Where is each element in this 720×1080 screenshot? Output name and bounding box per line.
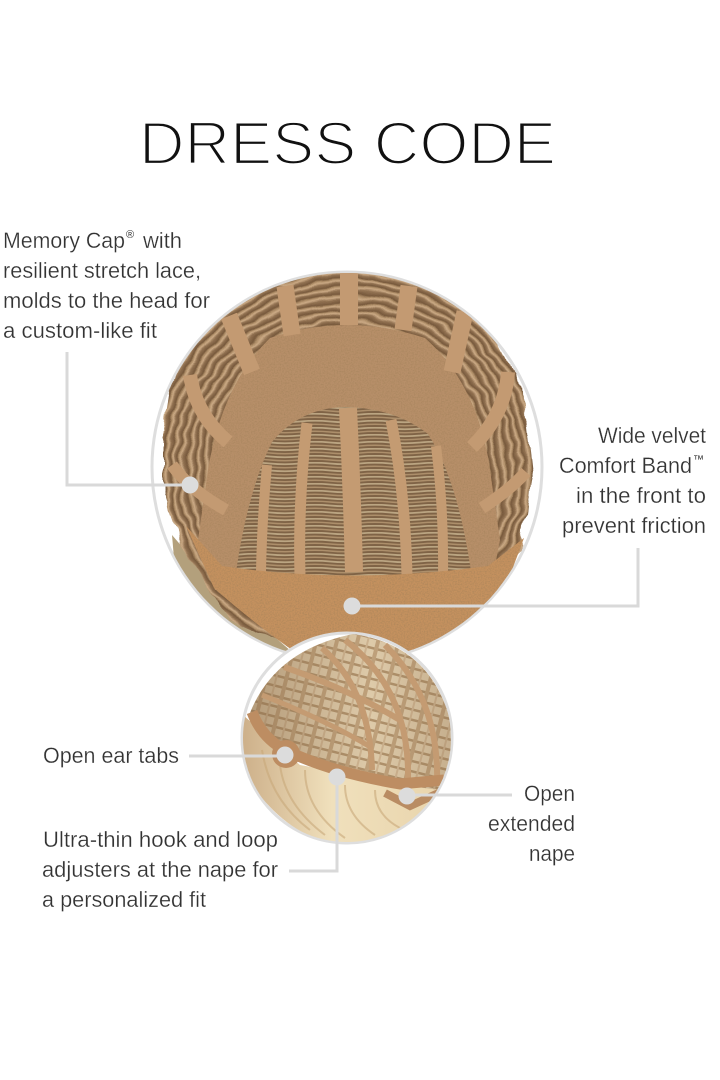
- callout: comfort band: [344, 423, 706, 614]
- dome shading: [250, 634, 452, 790]
- dome straps: [262, 640, 437, 785]
- inner wefts opening: [236, 407, 471, 578]
- callout: memory cap: resilient stretch lace,: [3, 258, 201, 283]
- fringe of hair below the band: [172, 535, 292, 652]
- infographic canvas: [4, 122, 706, 912]
- callout: ear tabs: [43, 743, 294, 768]
- callout: extended nape: Open: [524, 781, 575, 806]
- inner stretch straps: [261, 408, 443, 575]
- callout: ear tabs: Open ear tabs: [43, 743, 179, 768]
- callout: memory cap: Memory Cap: [3, 228, 125, 253]
- open wefts dome: [250, 634, 452, 790]
- callout: comfort band: in the front to: [576, 483, 706, 508]
- large cap photo: inside view: [152, 262, 542, 662]
- velvet comfort band: [186, 526, 524, 655]
- callout: hook and loop adjusters: Ultra-thin hook and loop: [43, 827, 278, 852]
- blonde hair: [243, 715, 440, 845]
- title: DRESS CODE: [139, 109, 556, 177]
- outer stretch straps: [172, 272, 526, 510]
- callout: extended nape: [398, 781, 575, 866]
- callout: hook and loop adjusters: adjusters at the nape for: [42, 857, 278, 882]
- callout: comfort band: prevent friction: [562, 513, 706, 538]
- outer wefts of hair: [163, 262, 532, 650]
- callout: hook and loop adjusters: a personalized fit: [42, 887, 206, 912]
- small cap photo: nape view: [242, 633, 452, 845]
- callout: extended nape: nape: [529, 841, 575, 866]
- callout: memory cap: a custom-like fit: [3, 318, 157, 343]
- callout: memory cap: ®: [126, 229, 134, 241]
- nape band with ear tab and adjuster: [252, 712, 444, 784]
- callout: hook and loop adjusters: [42, 768, 346, 912]
- callout: memory cap: with: [142, 228, 182, 253]
- callout: extended nape: extended: [488, 811, 575, 836]
- callout: memory cap: [3, 228, 210, 494]
- callout: memory cap: molds to the head for: [3, 288, 210, 313]
- hair strands: [262, 750, 400, 838]
- callout: comfort band: ™: [693, 454, 704, 466]
- callout: comfort band: Wide velvet: [598, 423, 706, 448]
- callout: comfort band: Comfort Band: [559, 453, 692, 478]
- stretch lace crown: [198, 325, 500, 590]
